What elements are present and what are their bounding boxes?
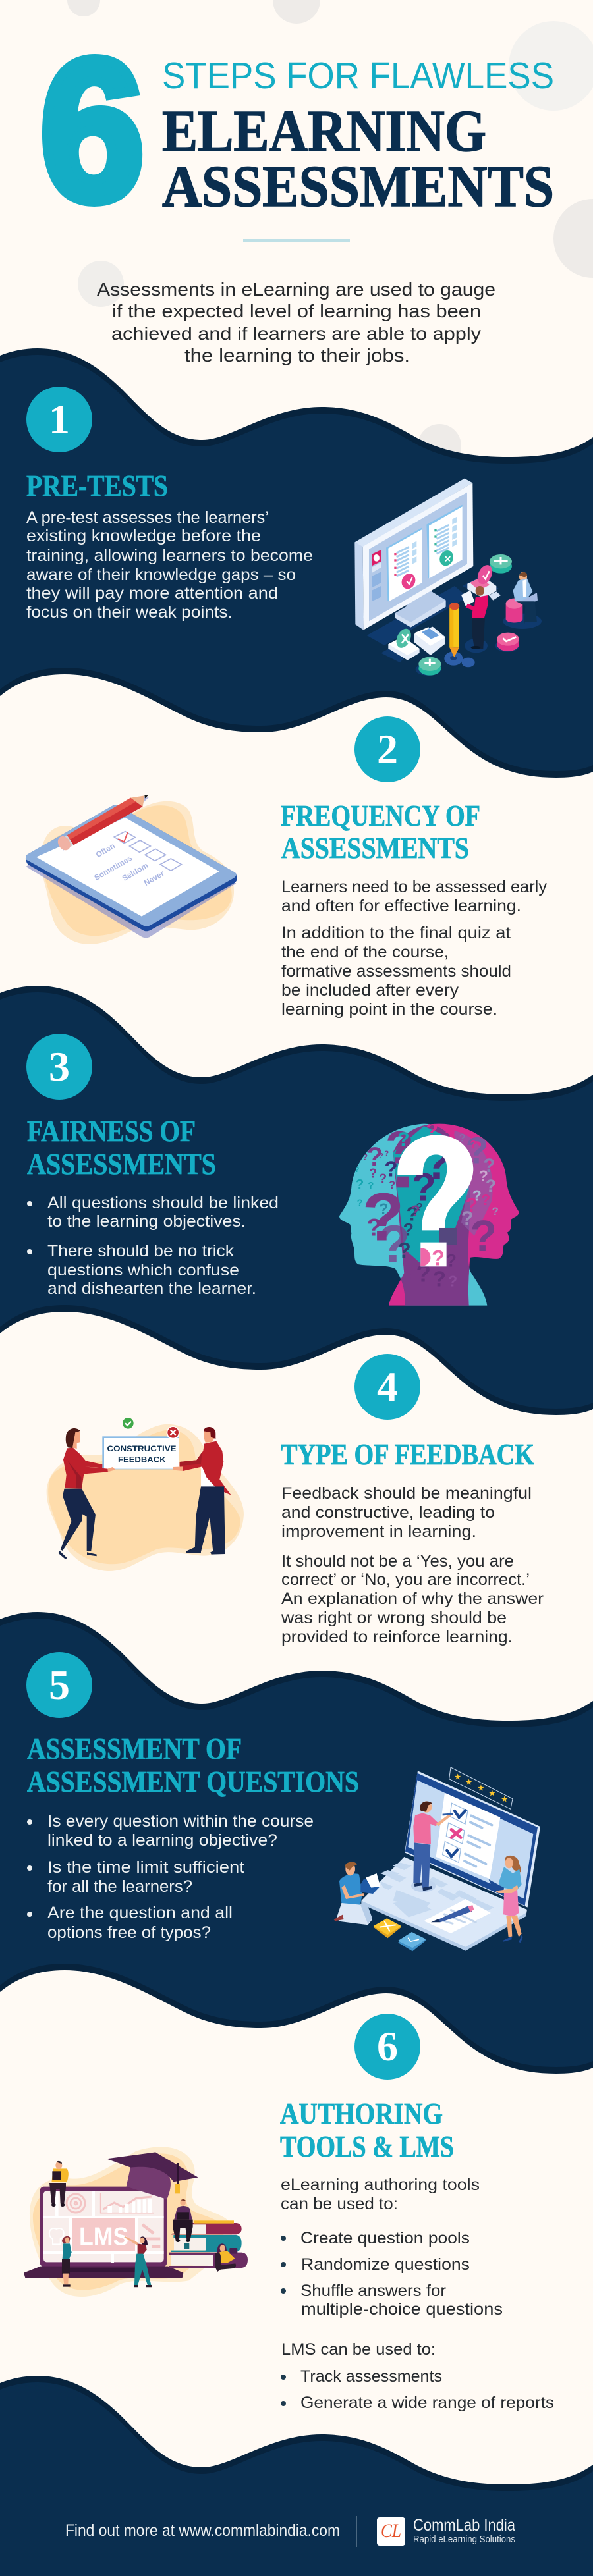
star rating: ★ <box>477 1783 485 1792</box>
body text <box>281 1484 544 1646</box>
bullet list: Is every question within the course <box>47 1812 314 1831</box>
number badge 3: 3 <box>49 1043 70 1090</box>
laptop base <box>361 1857 527 1950</box>
number badge 1: 1 <box>49 396 70 443</box>
monitor <box>354 479 472 547</box>
woman on books <box>215 2243 237 2272</box>
intro text: if the expected level of learning has been <box>112 301 481 321</box>
number badge 6 <box>354 2014 420 2080</box>
bullet list: to the learning objectives. <box>47 1212 246 1231</box>
illustration: two people holding a feedback sign: CONSTRUCTIVE <box>107 1444 176 1453</box>
body text: In addition to the final quiz at <box>281 924 511 942</box>
heading: ASSESSMENTS <box>27 1147 216 1181</box>
intro text: the learning to their jobs. <box>184 345 410 365</box>
body text: focus on their weak points. <box>26 603 233 622</box>
number badge 4 <box>354 1354 420 1420</box>
body text: learning point in the course. <box>281 1000 497 1019</box>
body text <box>26 508 313 622</box>
illustration: computer monitor with tests <box>354 479 542 676</box>
body text and lists: Generate a wide range of reports <box>300 2394 554 2412</box>
woman <box>58 1428 115 1559</box>
footer <box>65 2516 515 2547</box>
woman with hand on chin <box>62 2236 72 2287</box>
standing man drawing <box>411 1880 436 1892</box>
papers and tokens <box>414 627 445 655</box>
intro text: achieved and if learners are able to apply <box>111 323 481 344</box>
question marks: ? <box>389 1179 395 1191</box>
body text: improvement in learning. <box>281 1522 476 1541</box>
star rating <box>449 1767 513 1809</box>
body text and lists: can be used to: <box>281 2195 398 2213</box>
illustration: two people holding a feedback sign: FEEDBACK <box>118 1455 166 1464</box>
star rating: ★ <box>465 1777 472 1787</box>
question marks: ? <box>472 1187 482 1204</box>
question marks: ? <box>385 1122 414 1173</box>
illustration: laptop with checklist and people <box>334 1767 540 1951</box>
question marks: ? <box>356 1177 364 1192</box>
question marks: ? <box>492 1205 499 1218</box>
body text and lists: eLearning authoring tools <box>281 2176 480 2194</box>
body text: and constructive, leading to <box>281 1503 495 1522</box>
checklist labels: Never <box>142 869 166 888</box>
checklist labels: Seldom <box>121 861 150 883</box>
CommLab logo icon <box>377 2517 405 2546</box>
pencil <box>59 797 150 851</box>
bullet list: for all the learners? <box>47 1877 192 1896</box>
body text: It should not be a ‘Yes, you are <box>281 1552 514 1570</box>
checklist labels: Sometimes <box>92 853 134 882</box>
body text: was right or wrong should be <box>281 1609 507 1627</box>
question marks: ? <box>362 1178 404 1254</box>
bullet list: Is the time limit sufficient <box>47 1858 244 1877</box>
bullet list <box>27 1812 314 1942</box>
body text: provided to reinforce learning. <box>281 1628 513 1646</box>
question marks <box>354 1120 499 1291</box>
check and cross tokens <box>399 572 418 591</box>
heading: TOOLS & LMS <box>280 2130 454 2163</box>
bullet list: questions which confuse <box>47 1261 239 1279</box>
bullet list: options free of typos? <box>47 1923 211 1942</box>
laptop <box>40 2187 167 2267</box>
heading: PRE-TESTS <box>26 469 168 502</box>
question marks: ? <box>416 1200 423 1213</box>
pointing woman <box>124 2236 152 2287</box>
illustration: two heads with question marks: ? <box>432 1246 445 1270</box>
bullet list: All questions should be linked <box>47 1194 279 1212</box>
answer tiles <box>374 1918 401 1938</box>
body text and lists: Create question pools <box>300 2229 470 2247</box>
seated man with notebook <box>336 1903 372 1925</box>
title <box>40 18 554 242</box>
question marks: ? <box>426 1120 438 1142</box>
question marks: ? <box>403 1220 414 1240</box>
question marks: ? <box>412 1165 436 1209</box>
heading: ASSESSMENT QUESTIONS <box>27 1765 359 1798</box>
heading <box>280 2097 454 2163</box>
heading: AUTHORING <box>280 2097 443 2130</box>
body text: they will pay more attention and <box>26 584 278 603</box>
question marks: ? <box>379 1172 387 1187</box>
panel: step 6 authoring tools and LMS <box>24 2014 554 2412</box>
seated learner with laptop <box>506 599 522 622</box>
title line 1: STEPS FOR FLAWLESS <box>162 55 554 97</box>
pencil on paper <box>424 1899 491 1933</box>
laptop screen <box>405 1771 540 1908</box>
man on books <box>173 2199 193 2242</box>
checklist labels: Often <box>94 841 117 859</box>
panel: step 5 assessment of assessment questions <box>26 1652 540 1951</box>
question marks: ? <box>397 1239 411 1263</box>
question marks: ? <box>384 1158 398 1182</box>
number badge 2: 2 <box>377 726 398 772</box>
question marks: ? <box>448 1272 457 1289</box>
CommLab brand name: CommLab India <box>413 2516 515 2535</box>
bullet list: Are the question and all <box>47 1904 233 1922</box>
question marks: ? <box>407 1203 418 1225</box>
number badge 5: 5 <box>49 1661 70 1708</box>
question marks: ? <box>483 1155 495 1177</box>
number badge 2 <box>354 716 420 782</box>
heading: ASSESSMENTS <box>281 831 469 865</box>
cross badge <box>167 1426 180 1439</box>
checkboxes <box>114 832 181 871</box>
question marks: ? <box>379 1200 388 1217</box>
question marks: ? <box>466 1131 488 1172</box>
pencil and gears <box>444 651 463 666</box>
question marks: ? <box>369 1166 377 1181</box>
intro text: Assessments in eLearning are used to gauge <box>97 279 495 300</box>
LMS label: LMS <box>79 2222 128 2251</box>
checklist labels <box>92 841 166 888</box>
star rating: ★ <box>488 1788 496 1798</box>
body text: formative assessments should <box>281 962 511 980</box>
question marks: ? <box>461 1208 473 1229</box>
illustration: LMS laptop, cap, books and learners <box>24 2147 248 2297</box>
heading <box>27 1114 216 1181</box>
star rating: ★ <box>501 1794 508 1804</box>
man on top of laptop <box>49 2161 69 2207</box>
screen icons <box>49 2193 160 2247</box>
heading: ASSESSMENT OF <box>27 1732 242 1765</box>
question marks: ? <box>410 1202 420 1220</box>
number badge 6: 6 <box>377 2023 398 2070</box>
question marks: ? <box>379 1152 383 1160</box>
find out more text: Find out more at www.commlabindia.com <box>65 2521 340 2540</box>
man <box>173 1427 231 1555</box>
question marks: ? <box>445 1125 455 1145</box>
body text: be included after every <box>281 981 459 1000</box>
body text: aware of their knowledge gaps – so <box>26 566 296 584</box>
body text: the end of the course, <box>281 943 449 961</box>
question marks: ? <box>354 1166 359 1174</box>
tagline: Rapid eLearning Solutions <box>413 2534 515 2545</box>
body text and lists: LMS can be used to: <box>281 2340 436 2359</box>
question marks: ? <box>470 1138 476 1150</box>
question marks: ? <box>397 1129 410 1150</box>
question marks: ? <box>423 1135 452 1189</box>
body text and lists <box>281 2176 554 2412</box>
body text and lists: Track assessments <box>300 2367 442 2386</box>
question marks: ? <box>479 1167 488 1184</box>
checklist <box>443 1803 468 1862</box>
question marks: ? <box>481 1191 490 1208</box>
bullet list: and dishearten the learner. <box>47 1279 256 1298</box>
heading <box>27 1732 359 1798</box>
heading: FAIRNESS OF <box>27 1114 196 1148</box>
CommLab logo icon: CL <box>381 2520 401 2542</box>
title line 2: ELEARNING <box>162 99 486 164</box>
body text: Feedback should be meaningful <box>281 1484 532 1503</box>
question marks: ? <box>446 1250 457 1270</box>
question marks: ? <box>459 1131 466 1144</box>
title line 3: ASSESSMENTS <box>162 154 554 219</box>
panel: step 3 fairness of assessments <box>26 1034 527 1310</box>
bullet list: There should be no trick <box>47 1242 235 1260</box>
question marks: ? <box>357 1198 363 1209</box>
body text: correct’ or ‘No, you are incorrect.’ <box>281 1570 530 1589</box>
bullet list: linked to a learning objective? <box>47 1831 277 1850</box>
panel: step 4 type of feedback <box>47 1354 544 1646</box>
body text and lists: multiple-choice questions <box>301 2300 503 2319</box>
panel: step 2 frequency of assessments <box>26 716 547 1019</box>
body text: existing knowledge before the <box>26 527 261 545</box>
question marks: ? <box>470 1212 497 1261</box>
body text: and often for effective learning. <box>281 897 521 915</box>
question marks: ? <box>384 1150 389 1158</box>
body text <box>281 878 547 1019</box>
question marks: ? <box>403 1260 416 1285</box>
question marks: ? <box>367 1214 381 1241</box>
stand <box>395 591 446 628</box>
learner with tablet <box>476 586 484 596</box>
number badge 4: 4 <box>377 1363 398 1410</box>
question marks: ? <box>416 1260 431 1287</box>
illustration: two heads with question marks <box>339 1123 519 1306</box>
question marks: ? <box>378 1215 410 1274</box>
big number 6: 6 <box>40 18 144 242</box>
question marks: ? <box>362 1152 368 1162</box>
sign with text <box>102 1436 179 1469</box>
question marks: ? <box>367 1142 383 1171</box>
books stack <box>169 2220 248 2268</box>
illustration: two people holding a feedback sign <box>47 1418 244 1571</box>
intro text <box>97 279 495 365</box>
illustration: survey clipboard and pencil <box>26 795 237 944</box>
large white question mark <box>397 1135 473 1230</box>
question marks: ? <box>486 1176 496 1196</box>
body text and lists: Shuffle answers for <box>300 2282 446 2300</box>
question marks: ? <box>466 1194 478 1216</box>
body text: A pre-test assesses the learners’ <box>26 508 269 527</box>
body text: Learners need to be assessed early <box>281 878 547 896</box>
heading: TYPE OF FEEDBACK <box>281 1437 534 1471</box>
number badge 5 <box>26 1652 92 1718</box>
body text: training, allowing learners to become <box>26 547 313 565</box>
body text: An explanation of why the answer <box>281 1590 544 1608</box>
heading: FREQUENCY OF <box>281 799 480 832</box>
question marks: ? <box>368 1181 374 1191</box>
check badge <box>123 1418 134 1429</box>
star rating: ★ <box>454 1772 461 1782</box>
body text and lists: Randomize questions <box>301 2255 470 2274</box>
bullet list <box>27 1194 279 1298</box>
number badge 1 <box>26 387 92 452</box>
decorative background circles <box>67 0 593 468</box>
question marks: ? <box>433 1267 446 1291</box>
heading <box>281 799 480 865</box>
woman with tablet <box>505 1856 521 1872</box>
panel: step 1 pre-tests <box>26 387 542 676</box>
graduation cap <box>127 2166 171 2199</box>
number badge 3 <box>26 1034 92 1100</box>
